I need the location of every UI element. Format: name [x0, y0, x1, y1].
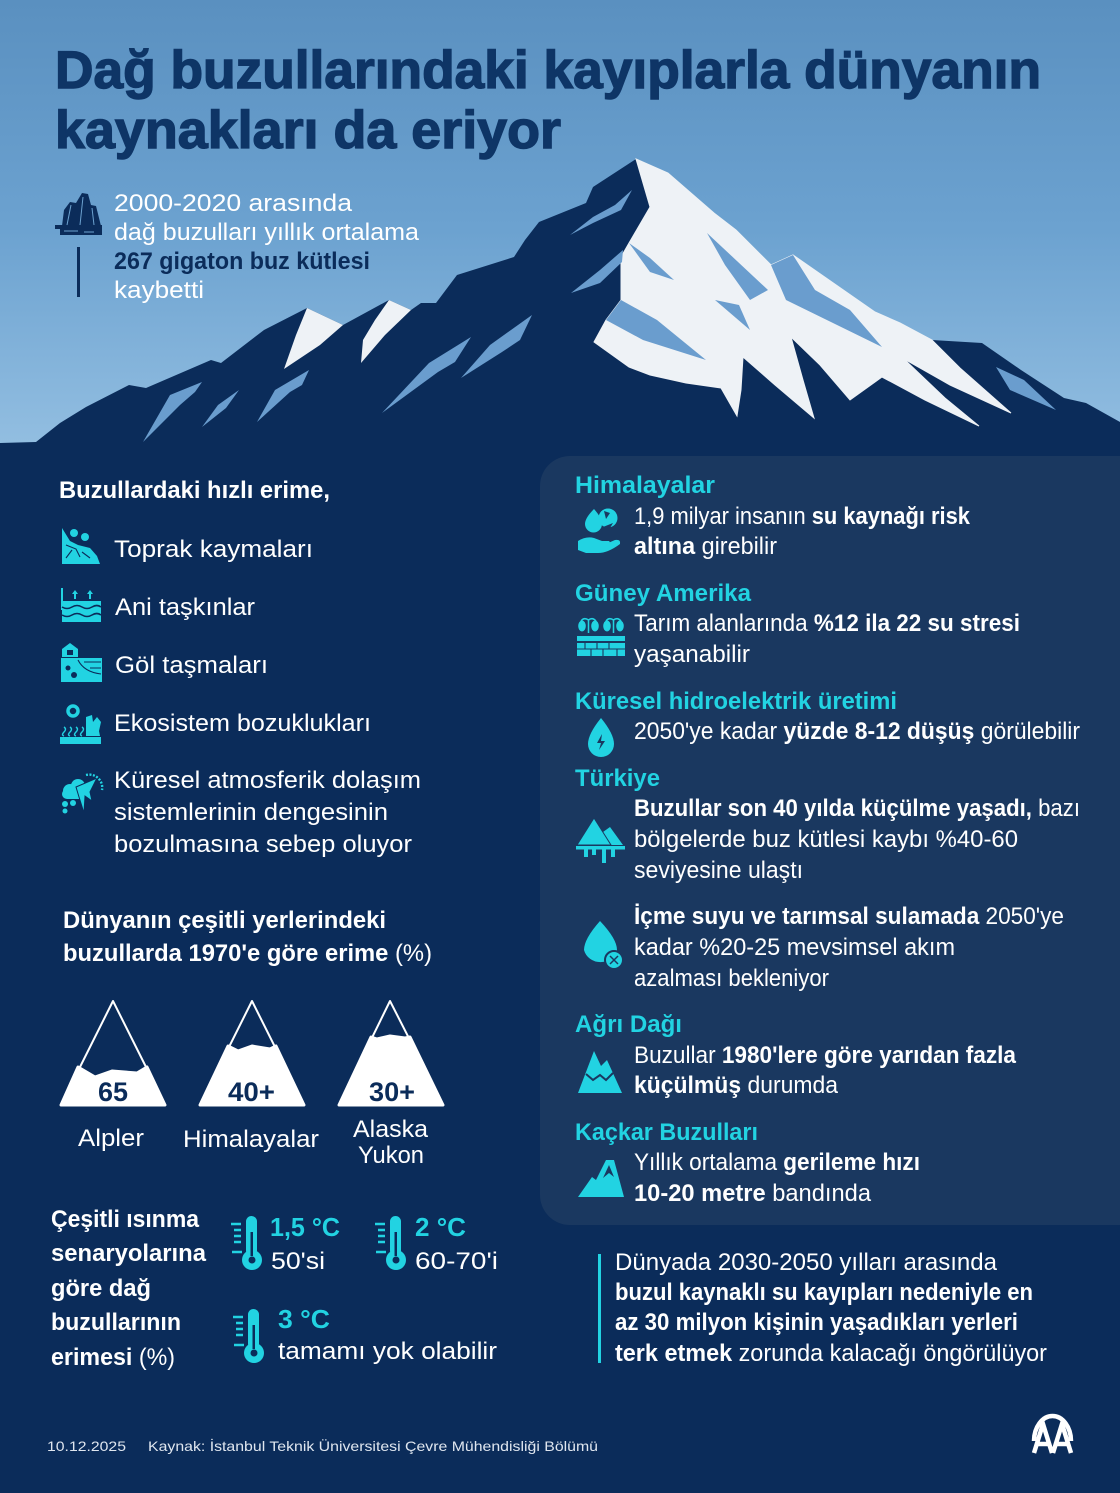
- intro text: 2000-2020 arasında: [114, 190, 352, 217]
- icon: water drop with bolt: [588, 718, 614, 757]
- callout: displacement: [615, 1249, 1047, 1367]
- section: Kackar glaciers: Kaçkar Buzulları: [575, 1119, 758, 1146]
- section: South America: Tarım alanlarında %12 ila 22 su stresi: [634, 610, 1020, 637]
- section: Himalayas: Himalayalar: [575, 472, 715, 499]
- title: kaynakları da eriyor: [55, 101, 561, 160]
- heading: rapid melting: Buzullardaki hızlı erime,: [59, 477, 330, 504]
- icon: Kackar mountain: [578, 1160, 624, 1197]
- mountain: Alaska Yukon 30+: Yukon: [358, 1142, 424, 1169]
- section: South America: yaşanabilir: [634, 641, 750, 668]
- scenario: 1.5 C: [231, 1212, 340, 1275]
- icon: ecosystem: [60, 706, 101, 744]
- icon: thermometer: [375, 1216, 406, 1270]
- section: Turkey: kadar %20-25 mevsimsel akım: [634, 934, 955, 961]
- scenario: 1.5 C: 50'si: [271, 1248, 325, 1275]
- item: lake overflows: Göl taşmaları: [115, 652, 268, 679]
- list: consequences: [60, 528, 421, 858]
- icon: thermometer: [233, 1309, 264, 1363]
- heading: warming scenarios: senaryolarına: [51, 1240, 206, 1267]
- mountain: Himalayas 40+: 40+: [228, 1077, 275, 1107]
- section: global hydropower: [575, 688, 1080, 757]
- intro text: 267 gigaton buz kütlesi: [114, 248, 370, 275]
- heading: melting since 1970: [63, 907, 432, 967]
- icon: water drop with cross: [584, 921, 623, 969]
- section: Turkey: azalması bekleniyor: [634, 965, 829, 992]
- section: Turkey: [575, 765, 1080, 992]
- icon: lake overflow: [61, 643, 102, 682]
- title: [55, 41, 1041, 160]
- section: Turkey: seviyesine ulaştı: [634, 857, 803, 884]
- callout: displacement: az 30 milyon kişinin yaşadıkları yerleri: [615, 1309, 1018, 1336]
- section: Himalayas: altına girebilir: [634, 533, 777, 560]
- section: Turkey: Buzullar son 40 yılda küçülme yaşadı, bazı: [634, 795, 1080, 822]
- callout: displacement: Dünyada 2030-2050 yılları arasında: [615, 1249, 997, 1276]
- section: Turkey: Türkiye: [575, 765, 660, 792]
- callout: displacement: buzul kaynaklı su kayıpları nedeniyle en: [615, 1279, 1033, 1306]
- heading: warming scenarios: [51, 1206, 206, 1371]
- heading: warming scenarios: erimesi (%): [51, 1344, 175, 1371]
- scenario: 2 C: 2 °C: [415, 1212, 466, 1242]
- icon: Ararat mountain: [578, 1051, 622, 1093]
- item: atmospheric circulation: Küresel atmosferik dolaşım: [114, 767, 421, 794]
- section: Himalayas: 1,9 milyar insanın su kaynağı risk: [634, 503, 970, 530]
- section: Mount Ararat: küçülmüş durumda: [634, 1072, 838, 1099]
- heading: warming scenarios: buzullarının: [51, 1309, 181, 1336]
- heading: melting since 1970: buzullarda 1970'e göre erime (%): [63, 940, 432, 967]
- accent bar: [598, 1254, 601, 1363]
- scenario: 3 C: 3 °C: [278, 1304, 330, 1334]
- section: global hydropower: Küresel hidroelektrik üretimi: [575, 688, 897, 715]
- icon: flood: [61, 588, 101, 622]
- icon: thermometer: [231, 1216, 262, 1270]
- title: Dağ buzullarındaki kayıplarla dünyanın: [55, 41, 1041, 100]
- footer source: Kaynak: İstanbul Teknik Üniversitesi Çevre Mühendisliği Bölümü: [148, 1437, 598, 1454]
- icon: hand with water and globe: [578, 508, 620, 553]
- item: atmospheric circulation: sistemlerinin dengesinin: [114, 799, 388, 826]
- section: global hydropower: 2050'ye kadar yüzde 8-12 düşüş görülebilir: [634, 718, 1080, 745]
- section: Mount Ararat: Buzullar 1980'lere göre yarıdan fazla: [634, 1042, 1016, 1069]
- section: Himalayas: [575, 472, 970, 560]
- panel: regional impacts: [540, 456, 1120, 1225]
- mountain: Alaska Yukon 30+: 30+: [369, 1077, 415, 1107]
- mountain: Himalayas 40+: Himalayalar: [183, 1126, 319, 1153]
- scenario: 1.5 C: 1,5 °C: [270, 1212, 340, 1242]
- section: Mount Ararat: [575, 1011, 1016, 1099]
- item: atmospheric circulation: [114, 767, 421, 858]
- mountain: Alps 65: 65: [98, 1077, 128, 1107]
- callout: displacement: terk etmek zorunda kalacağı öngörülüyor: [615, 1340, 1047, 1367]
- section: Kackar glaciers: [575, 1119, 920, 1207]
- section: South America: [575, 580, 1020, 668]
- item: ecosystem disruption: Ekosistem bozuklukları: [114, 710, 371, 737]
- section: Kackar glaciers: Yıllık ortalama gerileme hızı: [634, 1149, 920, 1176]
- footer date: 10.12.2025: [47, 1438, 126, 1454]
- mountain: Alaska Yukon 30+: Alaska: [353, 1116, 428, 1143]
- icon: atmospheric storm: [62, 775, 102, 814]
- logo: AA: [1034, 1416, 1071, 1453]
- icon: landslide: [62, 528, 100, 564]
- section: Kackar glaciers: 10-20 metre bandında: [634, 1180, 871, 1207]
- sky background: [0, 0, 1120, 460]
- section: Turkey: İçme suyu ve tarımsal sulamada 2050'ye: [634, 903, 1064, 930]
- intro text: dağ buzulları yıllık ortalama: [114, 219, 419, 246]
- chart: melted mountains: [61, 1001, 443, 1169]
- icon: melting mountains: [576, 818, 625, 863]
- item: landslides: Toprak kaymaları: [114, 536, 313, 563]
- heading: melting since 1970: Dünyanın çeşitli yerlerindeki: [63, 907, 386, 934]
- mountain: Himalayas 40+: [183, 1001, 319, 1153]
- icon: farm soil with sprouts: [577, 619, 625, 656]
- heading: warming scenarios: göre dağ: [51, 1275, 151, 1302]
- section: Mount Ararat: Ağrı Dağı: [575, 1011, 682, 1038]
- heading: warming scenarios: Çeşitli ısınma: [51, 1206, 199, 1233]
- mountain illustration: [0, 159, 1120, 460]
- scenario: 3 C: [233, 1304, 497, 1365]
- intro text: [114, 190, 419, 304]
- icon: iceberg: [55, 193, 102, 235]
- mountain: Alps 65: Alpler: [78, 1125, 144, 1152]
- intro text: kaybetti: [114, 277, 204, 304]
- scenario: 2 C: [375, 1212, 498, 1275]
- divider bar: [77, 247, 80, 297]
- dark lower background: [0, 444, 1120, 1493]
- mountain: Alaska Yukon 30+: [339, 1001, 443, 1169]
- item: flash floods: Ani taşkınlar: [115, 594, 255, 621]
- mountain: Alps 65: [61, 1001, 165, 1152]
- item: atmospheric circulation: bozulmasına sebep oluyor: [114, 831, 412, 858]
- scenario: 2 C: 60-70'i: [415, 1248, 498, 1275]
- scenario: 3 C: tamamı yok olabilir: [278, 1338, 497, 1365]
- section: South America: Güney Amerika: [575, 580, 751, 607]
- section: Turkey: bölgelerde buz kütlesi kaybı %40-60: [634, 826, 1018, 853]
